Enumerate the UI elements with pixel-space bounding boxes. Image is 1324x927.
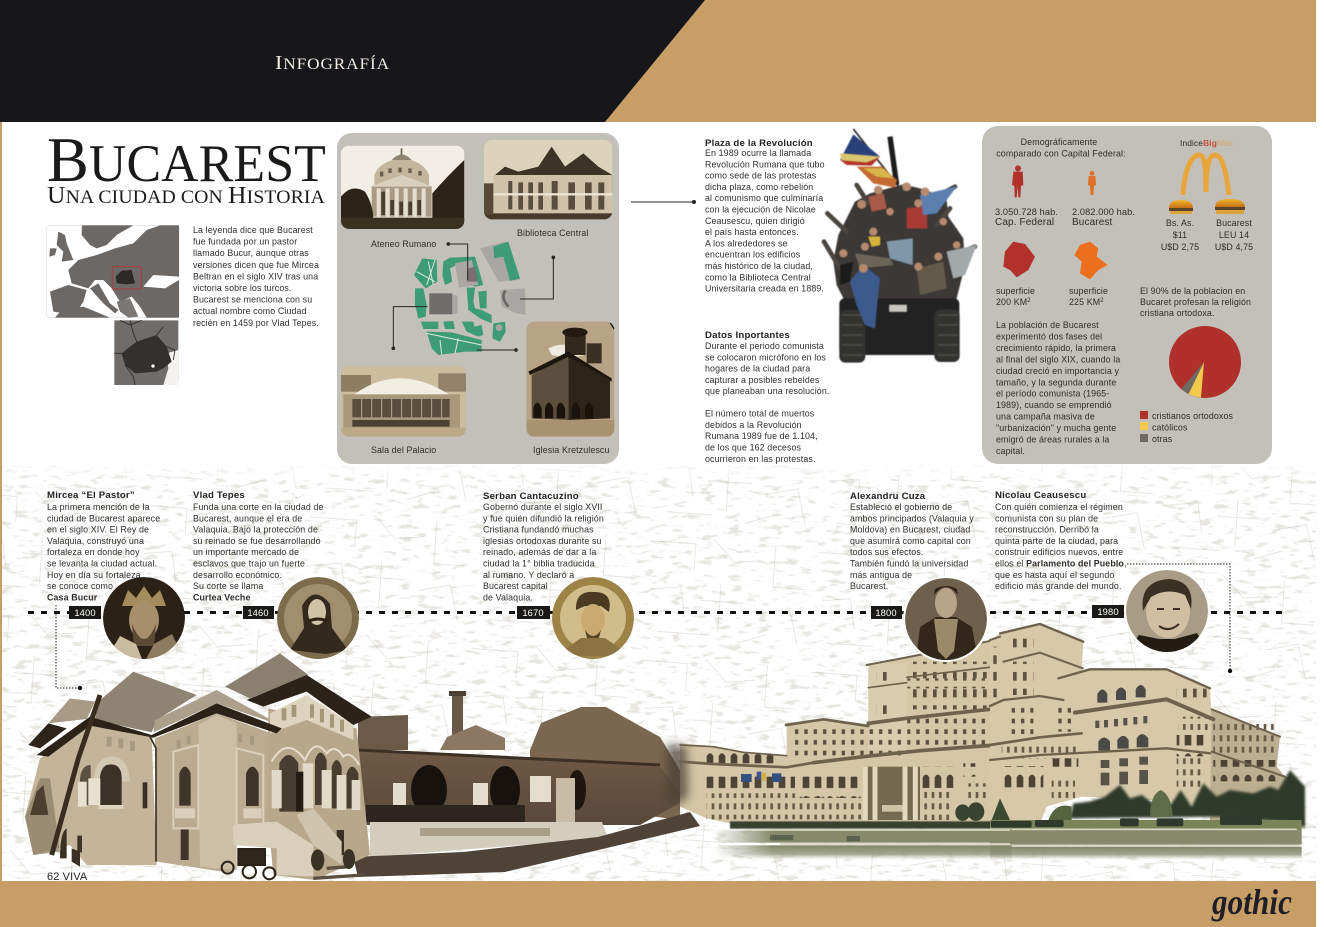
- text: Datos Inportantes: [705, 330, 829, 464]
- population paragraph: capital.: [996, 446, 1025, 456]
- religion text: El 90% de la poblacion en: [1140, 286, 1245, 296]
- year 1980: 1980: [1097, 606, 1119, 617]
- back-left wall details: [107, 733, 254, 751]
- stairs: [233, 822, 313, 877]
- building: ruins of Curtea Veche: [353, 691, 700, 877]
- text: Datos Inportantes: que planeaban una resolución.: [705, 386, 829, 396]
- hedges: [991, 815, 1262, 828]
- crowd mass: [833, 184, 965, 305]
- year 1670: 1670: [522, 607, 544, 618]
- upper tower: [270, 695, 353, 740]
- biography: Vlad: [193, 490, 324, 602]
- price: Buenos Aires: U$D 2,75: [1161, 242, 1199, 252]
- portrait: Vlad: [277, 577, 359, 659]
- biography: Ceausescu: edificio más grande del mundo.: [995, 581, 1122, 591]
- population paragraph: ciudad creció en importancia y: [996, 366, 1120, 376]
- biography: Cuza: más antigua de: [850, 570, 912, 580]
- biography: Serban: y fue quién difundió la religión: [483, 513, 604, 523]
- title block: [47, 124, 326, 209]
- main title: BUCAREST: [47, 124, 326, 195]
- carriage: [222, 849, 275, 879]
- subtitle: UNA CIUDAD CON HISTORIA: [47, 183, 326, 209]
- biography: Vlad: esclavos que trajo un fuerte: [193, 558, 305, 568]
- shape: Capital Federal area: [1003, 242, 1035, 277]
- population paragraph: crecimiento rápido, la primera: [996, 343, 1116, 353]
- biography: Ceausescu: ellos el Parlamento del Pueblo,: [995, 558, 1127, 568]
- label: Biblioteca Central: Biblioteca Central: [517, 228, 588, 238]
- left tan edge: [0, 122, 2, 882]
- biography: Serban: al rumano. Y declaró a: [483, 570, 574, 580]
- icon: burger small: [1169, 200, 1193, 214]
- biography: Serban: Serban Cantacuzino: [483, 491, 579, 502]
- text: Datos Inportantes: hogares de la ciudad para: [705, 364, 810, 374]
- biography: Mircea: Mircea “El Pastor”: [47, 490, 135, 501]
- population: Capital Federal: [995, 207, 1058, 228]
- area: Capital Federal: 2: [1027, 298, 1031, 304]
- population paragraph: tamaño, y la segunda durante: [996, 377, 1116, 387]
- text: Datos Inportantes: ocurrieron en las protestas.: [705, 454, 816, 464]
- biography: Ceausescu: quinta parte de la ciudad, para: [995, 536, 1118, 546]
- section label: INFOGRAFÍA: [275, 52, 390, 74]
- flags: [741, 772, 781, 782]
- biography: Cuza: que asumirá como capital con: [850, 536, 971, 546]
- biography: Serban: Bucarest capital: [483, 581, 548, 591]
- text: Plaza de la Revolución: Universitaria creada en 1889.: [705, 284, 824, 294]
- biography: Ceausescu: que es hasta aquí el segundo: [995, 570, 1114, 580]
- area: Bucarest: 2: [1100, 298, 1104, 304]
- label: Sala del Palacio: Sala del Palacio: [371, 445, 436, 455]
- biography: Ceausescu: comunista con su plan de: [995, 513, 1098, 523]
- cornices: [990, 624, 1285, 777]
- photo: Sala del Palacio: [341, 366, 466, 438]
- biography: Mircea: se conoce como: [47, 581, 113, 591]
- text: Plaza de la Revolución: encuentran los edificios: [705, 250, 801, 260]
- year 1460: 1460: [247, 607, 269, 618]
- intro text: llamado Bucur, aunque otras: [193, 248, 309, 258]
- top banner: [0, 0, 1316, 122]
- bottom band: [0, 881, 1316, 927]
- text: Plaza de la Revolución: dicha plaza, como rebelión: [705, 182, 813, 192]
- text: Plaza de la Revolución: En 1989 ocurre la llamada: [705, 148, 811, 158]
- biography: Mircea: La primera mención de la: [47, 502, 150, 512]
- city plan: [414, 242, 526, 355]
- year 1980: [1092, 605, 1124, 618]
- biography: Vlad: Su corte se llama: [193, 581, 263, 591]
- portrait: Mircea: [103, 577, 185, 659]
- religion text: Bucaret profesan la religión: [1140, 297, 1251, 307]
- population: Capital Federal: 3.050.728 hab.: [995, 207, 1058, 217]
- intro text: victoria sobre los turcos.: [193, 283, 291, 293]
- biography: Ceausescu: reconstrucción. Derribó la: [995, 525, 1099, 535]
- trees: [1070, 770, 1305, 827]
- block windows: [1095, 716, 1148, 785]
- panel: landmarks: [337, 133, 619, 464]
- population paragraph: 1989), cuando se emprendió: [996, 400, 1112, 410]
- building: Casa Bucur: [25, 653, 372, 880]
- biography: Mircea: Hoy en día su fortaleza: [47, 570, 141, 580]
- lower arches: [920, 767, 953, 788]
- biography: Vlad: un importante mercado de: [193, 547, 299, 557]
- timeline: [28, 605, 1282, 619]
- trees and hedge: [955, 797, 1010, 822]
- text: Plaza de la Revolución: como la Biblioteca Central: [705, 272, 811, 282]
- pie legend: católicos: [1152, 422, 1188, 432]
- intro text: La leyenda dice que Bucarest: [193, 225, 313, 235]
- walls: [25, 725, 157, 865]
- roofs: [48, 698, 95, 723]
- biography: Vlad: Vlad Tepes: [193, 490, 245, 501]
- biography: Cuza: ambos principados (Valaquia y: [850, 513, 974, 523]
- left shadow with tree: [25, 778, 60, 855]
- biography: Serban: [483, 491, 604, 602]
- biography: Serban: reinado, además de dar a la: [483, 547, 596, 557]
- year 1460: [243, 606, 274, 619]
- block arches: [1097, 685, 1148, 751]
- price: Bucarest: Bucarest: [1216, 218, 1252, 228]
- population paragraph: "urbanización" y mucha gente: [996, 423, 1116, 433]
- biography: Mircea: se levanta la ciudad actual.: [47, 558, 157, 568]
- intro text: Bucarest se menciona con su: [193, 295, 312, 305]
- biography: Mircea: en el siglo XIV. El Rey de: [47, 525, 149, 535]
- biography: Vlad: Curtea Veche: [193, 592, 250, 602]
- photo: Biblioteca Central: [484, 140, 613, 220]
- population: Bucarest: [1072, 207, 1135, 228]
- intro text: versiones dicen que fue Mircea: [193, 260, 319, 270]
- population paragraph: una campaña masiva de: [996, 412, 1095, 422]
- lawn foreground: left fade: [713, 829, 1012, 860]
- intro text: fue fundada por un pastor: [193, 237, 297, 247]
- brand: gothic: gothic: [1211, 882, 1292, 922]
- population: Bucarest: 2.082.000 hab.: [1072, 207, 1135, 217]
- year 1800: 1800: [875, 607, 897, 618]
- biography: Vlad: Valaquia. Bajo la protección de: [193, 525, 318, 535]
- population paragraph: al final del siglo XIX, cuando la: [996, 354, 1120, 364]
- biography: Cuza: todos sus efectos.: [850, 547, 923, 557]
- icon: burger large: [1215, 199, 1245, 214]
- upper block windows: [907, 662, 1004, 678]
- panel: demographics: [982, 126, 1272, 464]
- arcade: [279, 752, 358, 812]
- downpipe: [150, 737, 156, 862]
- pie legend: otras: [1152, 434, 1173, 444]
- biography: Serban: Gobernó durante el siglo XVII: [483, 502, 603, 512]
- text: Plaza de la Revolución: con la ejecución de Nicolae: [705, 204, 816, 214]
- text: Datos Inportantes: El número total de muertos: [705, 409, 815, 419]
- intro text: recién en 1459 por Vlad Tepes.: [193, 318, 319, 328]
- year 1670: [517, 606, 550, 619]
- pie legend: [1140, 411, 1234, 444]
- left window arch: [93, 757, 130, 782]
- population paragraph: el período comunista (1965-: [996, 389, 1109, 399]
- year 1400: 1400: [74, 607, 96, 618]
- icon: orange person: [1088, 171, 1096, 195]
- text: Datos Inportantes: debidos a la Revolución: [705, 420, 802, 430]
- lower loggia dark: [337, 830, 344, 855]
- text: Plaza de la Revolución: el país hasta entonces.: [705, 227, 799, 237]
- connector lines: [392, 243, 555, 351]
- photo: Iglesia Kretzulescu: [526, 322, 614, 437]
- population paragraph: La población de Bucarest: [996, 320, 1099, 330]
- label: Iglesia Kretzulescu: Iglesia Kretzulescu: [533, 445, 610, 455]
- photo: revolution crowd on armored vehicle: [824, 129, 977, 363]
- portrait: Ceausescu: [1124, 568, 1210, 654]
- building: palace of the parliament, right part: [990, 623, 1305, 860]
- demographics heading: Demográficamente: [1021, 137, 1097, 147]
- map: Romania: [114, 320, 178, 385]
- label: Ateneo Rumano: Ateneo Rumano: [371, 239, 436, 249]
- photo: Ateneo Rumano: [341, 146, 464, 230]
- biography: Cuza: Bucarest.: [850, 581, 888, 591]
- tower windows: [1010, 638, 1033, 655]
- text: Datos Inportantes: Rumana 1989 fue de 1.104,: [705, 431, 818, 441]
- population paragraph: emigró de áreas rurales a la: [996, 434, 1109, 444]
- text: Datos Inportantes: Durante el periodo comunista: [705, 341, 824, 351]
- intro text: actual nombre como Ciudad: [193, 306, 307, 316]
- biography: Cuza: [850, 491, 974, 591]
- intro text: Beltran en el siglo XIV tras una: [193, 271, 318, 281]
- page number: 62 VIVA: [47, 871, 88, 883]
- biography: Ceausescu: Nicolau Ceausescu: [995, 490, 1086, 501]
- price: Bucarest: U$D 4,75: [1215, 242, 1253, 252]
- biography: Serban: de Valaquia.: [483, 592, 533, 602]
- text: Plaza de la Revolución: Revolución Rumana que tubo: [705, 159, 825, 169]
- price: Bucarest: LEU 14: [1219, 230, 1249, 240]
- pie chart: religion: [1169, 326, 1241, 398]
- cornices: [680, 635, 1010, 767]
- biography: Ceausescu: [995, 490, 1127, 591]
- text: Datos Inportantes: de los que 162 decesos: [705, 442, 802, 452]
- biography: Mircea: ciudad de Bucarest aparece: [47, 513, 160, 523]
- biography: Mircea: fortaleza en donde hoy: [47, 547, 140, 557]
- biography: Vlad: su reinado se fue desarrollando: [193, 536, 321, 546]
- biography: Serban: ciudad la 1° biblia traducida: [483, 558, 595, 568]
- area: Capital Federal: 200 KM: [996, 297, 1027, 307]
- biography: Vlad: desarrollo económico.: [193, 570, 282, 580]
- demographics heading: comparado con Capital Federal:: [996, 149, 1126, 159]
- map: Europe: [47, 225, 179, 318]
- central portico: [863, 767, 920, 820]
- biography: Ceausescu: construir edificios nuevos, entre: [995, 547, 1123, 557]
- text: Plaza de la Revolución: al comunismo que culminaría: [705, 193, 823, 203]
- biography: Serban: iglesias ortodoxas durante su: [483, 536, 602, 546]
- pie legend: cristianos ortodoxos: [1152, 411, 1234, 421]
- building: palace of the parliament, left part: [667, 633, 1010, 829]
- connector: Casa Bucur: [56, 605, 82, 690]
- population paragraph: experimentó dos fases del: [996, 331, 1102, 341]
- text: Plaza de la Revolución: Plaza de la Revolución: [705, 138, 813, 149]
- price: Buenos Aires: $11: [1173, 230, 1187, 240]
- area: Bucarest: superficie: [1069, 286, 1108, 296]
- biography: Ceausescu: Con quién comienza el régimen: [995, 502, 1123, 512]
- connector: Parlamento: [1127, 564, 1232, 673]
- biography: Mircea: Valaquia, construyó una: [47, 536, 144, 546]
- biography: Serban: Cristiana fundandó muchas: [483, 525, 594, 535]
- icon: golden arches: [1183, 155, 1229, 195]
- biography: Cuza: Moldova) en Bucarest, ciudad: [850, 525, 970, 535]
- biography: Cuza: Alexandru Cuza: [850, 491, 926, 502]
- eaves: [247, 675, 372, 725]
- biography: Mircea: Casa Bucur: [47, 592, 98, 602]
- year 1800: [871, 606, 902, 619]
- lawn: [990, 820, 1302, 831]
- connector: plaza: [631, 200, 696, 204]
- text: Datos Inportantes: capturar a posibles rebeldes: [705, 375, 820, 385]
- portrait: Serban: [552, 577, 634, 659]
- Big Mac index heading: IndiceBigMac: [1180, 138, 1233, 148]
- price: Buenos Aires: Bs. As.: [1166, 218, 1194, 228]
- area: Capital Federal: superficie: [996, 286, 1035, 296]
- population: Capital Federal: Cap. Federal: [995, 217, 1054, 228]
- icon: red person: [1012, 165, 1023, 197]
- area: Bucarest: 225 KM: [1069, 297, 1100, 307]
- text: Plaza de la Revolución: más histórico de la ciudad,: [705, 261, 813, 271]
- biography: Cuza: También fundó la universidad: [850, 558, 968, 568]
- map texture background: [2, 465, 1316, 881]
- text: Plaza de la Revolución: A los alrededores se: [705, 238, 788, 248]
- biography: Cuza: Estableció el gobierno de: [850, 502, 952, 512]
- text: Plaza de la Revolución: como sede de las protestas: [705, 171, 817, 181]
- portrait: Cuza: [903, 576, 989, 662]
- text: Plaza de la Revolución: [705, 138, 825, 294]
- text: Plaza de la Revolución: Ceausescu, quien dirigió: [705, 216, 805, 226]
- biography: Vlad: Bucarest, aunque el era de: [193, 513, 302, 523]
- text: Datos Inportantes: se colocaron micrófono en los: [705, 352, 826, 362]
- population: Bucarest: Bucarest: [1072, 217, 1113, 228]
- religion text: cristiana ortodoxa.: [1140, 308, 1215, 318]
- text: Datos Inportantes: Datos Inportantes: [705, 330, 790, 341]
- center windows: [77, 767, 259, 860]
- biography: Mircea: [47, 490, 160, 602]
- shape: Bucarest area: [1074, 242, 1108, 279]
- biography: Vlad: Funda una corte en la ciudad de: [193, 502, 324, 512]
- year 1400: [69, 606, 101, 619]
